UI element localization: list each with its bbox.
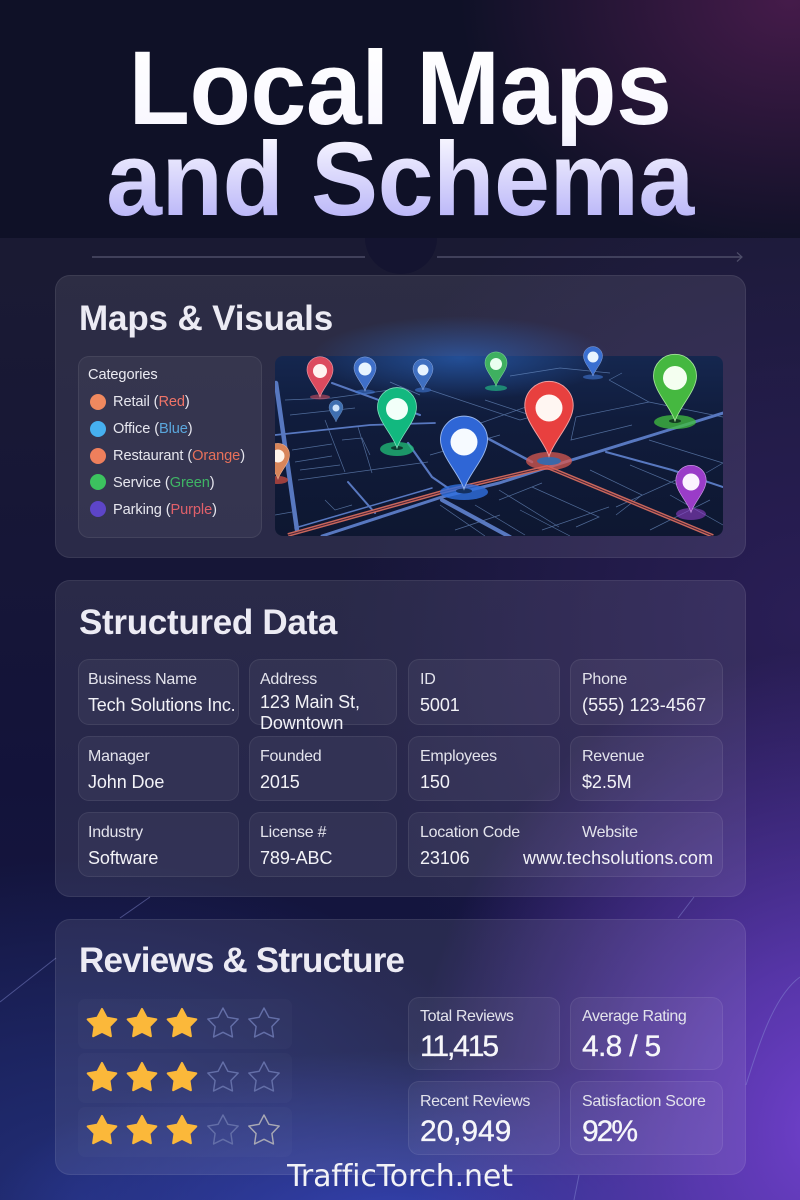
pin: small red: [307, 357, 333, 397]
card: id: ID: [420, 671, 436, 688]
card: address: Downtown: [260, 713, 343, 733]
star row two: [78, 1053, 292, 1103]
card: address: Address: [260, 671, 317, 688]
stat card: average rating: Average Rating: [582, 1008, 686, 1025]
legend title: Categories: [88, 367, 158, 383]
pin: purple: [676, 465, 706, 512]
panel: categories legend: Parking (Purple): [113, 502, 217, 518]
card: manager: John Doe: [88, 772, 164, 792]
title: and Schema: [106, 121, 694, 238]
star row three: [78, 1107, 292, 1157]
card: founded: [249, 736, 397, 801]
card: id: [408, 659, 560, 725]
card: employees: [408, 736, 560, 801]
pin: large green: [654, 354, 696, 421]
card: founded: Founded: [260, 748, 321, 765]
stat card: recent reviews: Recent Reviews: [420, 1093, 530, 1110]
stat card: satisfaction score: [570, 1081, 723, 1155]
legend item: retail: [90, 394, 190, 410]
stat card: recent reviews: 20,949: [420, 1115, 511, 1148]
card: industry: Industry: [88, 824, 143, 841]
card: location code and website: Website: [582, 824, 638, 841]
card: employees: Employees: [420, 748, 497, 765]
pin: orange: [275, 443, 290, 480]
map illustration with location pins: [275, 320, 723, 536]
card: id: 5001: [420, 695, 460, 715]
card: revenue: Revenue: [582, 748, 644, 765]
card: business name: Business Name: [88, 671, 197, 688]
stat card: total reviews: Total Reviews: [420, 1008, 514, 1025]
pin: top blue: [584, 347, 602, 376]
title divider arrow: [92, 252, 743, 262]
card: industry: Software: [88, 848, 158, 868]
card: license: License #: [260, 824, 326, 841]
card: location code and website: 23106: [420, 848, 470, 868]
pin: large red: [525, 381, 573, 456]
pin: tiny blue: [329, 400, 343, 422]
card: manager: [78, 736, 239, 801]
card: location code and website: www.techsolutions.com: [523, 848, 713, 868]
panel: categories legend: Office (Blue): [113, 421, 193, 437]
stat card: recent reviews: [408, 1081, 560, 1155]
star row one: [78, 999, 292, 1049]
legend item: restaurant: [90, 448, 245, 464]
card: industry: [78, 812, 239, 877]
card: phone: Phone: [582, 671, 627, 688]
card: location code and website: Location Code: [420, 824, 520, 841]
card: location code and website: [408, 812, 723, 877]
card: business name: [78, 659, 239, 725]
card: manager: Manager: [88, 748, 149, 765]
card: license: 789-ABC: [260, 848, 332, 868]
card: phone: [570, 659, 723, 725]
legend item: service: [90, 474, 215, 491]
pin: large blue: [440, 416, 488, 489]
panel: maps and visuals: [55, 275, 746, 558]
title: [17, 43, 783, 228]
panel: structured data: [55, 580, 746, 897]
card: revenue: $2.5M: [582, 772, 632, 792]
panel: categories legend: Restaurant (Orange): [113, 448, 245, 464]
stat card: total reviews: 11,415: [420, 1030, 497, 1063]
card: revenue: [570, 736, 723, 801]
pin: teal: [378, 388, 416, 448]
pin: blue two: [413, 359, 433, 390]
card: license: [249, 812, 397, 877]
panel: reviews and structure: [55, 919, 746, 1175]
card: business name: Tech Solutions Inc.: [88, 695, 235, 715]
panel: categories legend: [78, 356, 262, 538]
pin: blue one: [354, 357, 376, 391]
card: phone: (555) 123-4567: [582, 695, 706, 715]
card: address: 123 Main St,: [260, 692, 360, 712]
stat card: average rating: 4.8 / 5: [582, 1030, 660, 1063]
top title band: [0, 0, 800, 238]
card: employees: 150: [420, 772, 450, 792]
star rating rows: [86, 1007, 280, 1145]
stat card: average rating: [570, 997, 723, 1070]
stat card: satisfaction score: 92%: [582, 1115, 636, 1148]
heading: maps and visuals: Maps & Visuals: [79, 299, 333, 338]
footer watermark: TrafficTorch.net: [287, 1159, 513, 1194]
panel: categories legend: Service (Green): [113, 475, 215, 491]
stat card: total reviews: [408, 997, 560, 1070]
heading: structured data: Structured Data: [79, 603, 337, 642]
heading: reviews and structure: Reviews & Structure: [79, 941, 404, 980]
title: Local Maps: [128, 30, 672, 147]
pin: small green: [485, 352, 507, 386]
stat card: satisfaction score: Satisfaction Score: [582, 1093, 706, 1110]
legend item: office: [90, 421, 193, 437]
card: address: [249, 659, 397, 725]
card: founded: 2015: [260, 772, 300, 792]
legend item: parking: [90, 501, 217, 518]
panel: categories legend: Retail (Red): [113, 394, 190, 410]
